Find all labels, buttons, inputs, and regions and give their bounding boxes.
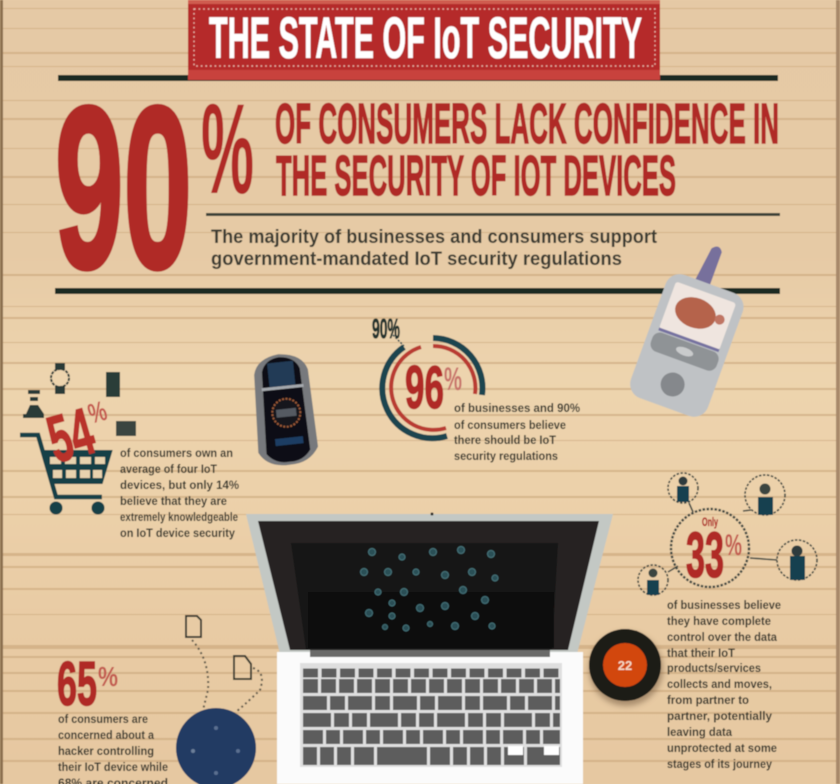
text: consumers own bbox=[120, 448, 239, 540]
text: consumers own: extremely knowledgeable bbox=[120, 512, 238, 524]
text: consumers own: believe that they are bbox=[120, 496, 227, 508]
text: hacker bbox=[58, 714, 168, 784]
90 percent label: 90% bbox=[372, 313, 400, 344]
laptop bbox=[246, 512, 613, 784]
laptop base bbox=[277, 652, 583, 784]
dotted connectors bbox=[192, 640, 262, 712]
33 percent label: % bbox=[725, 529, 742, 562]
96 percent label: 96 bbox=[405, 354, 444, 421]
text: regulations: of businesses and 90% bbox=[454, 403, 580, 415]
headline bbox=[275, 92, 779, 208]
65 percent label: % bbox=[98, 661, 118, 692]
icon: shopping cart bbox=[20, 435, 110, 514]
subheading bbox=[211, 227, 658, 270]
text: regulations: there should be IoT bbox=[454, 435, 556, 447]
text: businesses control: control over the data bbox=[667, 632, 778, 644]
text: businesses control: they have complete bbox=[667, 616, 771, 628]
text: hacker: concerned about a bbox=[58, 730, 155, 742]
text: regulations: of consumers believe bbox=[454, 420, 566, 432]
text: consumers own: average of four IoT bbox=[120, 464, 217, 476]
icon: document one bbox=[186, 616, 201, 637]
icon: appliance bbox=[116, 421, 136, 436]
icon: smart speaker bbox=[176, 708, 256, 784]
text: regulations: security regulations bbox=[454, 451, 558, 463]
text: consumers own: of consumers own an bbox=[120, 448, 233, 460]
lower rule bbox=[55, 288, 780, 294]
text: businesses control: partner, potentially bbox=[667, 711, 773, 723]
icon: thermostat: 22 bbox=[618, 658, 632, 673]
text: businesses control: products/services bbox=[667, 663, 761, 675]
divider bbox=[206, 213, 780, 216]
icon: watch bbox=[51, 364, 69, 393]
text: regulations bbox=[454, 403, 580, 463]
laptop screen bbox=[258, 521, 599, 650]
icon: document two bbox=[234, 656, 251, 679]
text: consumers own: on IoT device security bbox=[120, 528, 236, 540]
icon: thermostat bbox=[589, 629, 663, 706]
icon: connected car bbox=[23, 390, 44, 418]
subheading: government-mandated IoT security regulations bbox=[211, 249, 622, 270]
big stat 90%: 90 bbox=[55, 59, 192, 316]
33 percent label: 33 bbox=[686, 519, 724, 591]
65 percent label: 65 bbox=[57, 650, 97, 719]
icon: baby monitor bbox=[626, 234, 761, 421]
laptop lid bbox=[246, 514, 613, 654]
subheading: The majority of businesses and consumers support bbox=[211, 227, 658, 248]
33 percent label: Only bbox=[702, 515, 718, 529]
icon: phone bbox=[106, 372, 120, 397]
text: hacker: hacker controlling bbox=[58, 746, 154, 758]
icon: key fob bbox=[248, 351, 320, 468]
54 percent label: % bbox=[85, 395, 110, 430]
text: % bbox=[201, 78, 254, 221]
text: businesses control: from partner to bbox=[667, 695, 749, 707]
ring chart 96% bbox=[372, 313, 482, 438]
ring chart 96%: % bbox=[444, 361, 462, 397]
title banner bbox=[188, 0, 660, 80]
title rule bbox=[58, 75, 778, 81]
people figures bbox=[647, 476, 805, 595]
icon: people network bbox=[638, 473, 817, 595]
text: businesses control: that their IoT bbox=[667, 648, 735, 660]
text: businesses control: stages of its journey bbox=[667, 759, 773, 771]
text: businesses control: unprotected at some bbox=[667, 743, 777, 755]
text: businesses control: leaving data bbox=[667, 727, 733, 739]
text: hacker: their IoT device while bbox=[58, 762, 168, 774]
text: businesses control bbox=[667, 600, 781, 771]
keyboard bbox=[300, 663, 562, 767]
text: businesses control: collects and moves, bbox=[667, 679, 772, 691]
54 percent label: 54 bbox=[39, 393, 102, 477]
text: businesses control: of businesses believe bbox=[667, 600, 781, 612]
text: consumers own: devices, but only 14% bbox=[120, 480, 239, 492]
network of nodes bbox=[360, 546, 498, 631]
text: hacker: of consumers are bbox=[58, 714, 148, 726]
